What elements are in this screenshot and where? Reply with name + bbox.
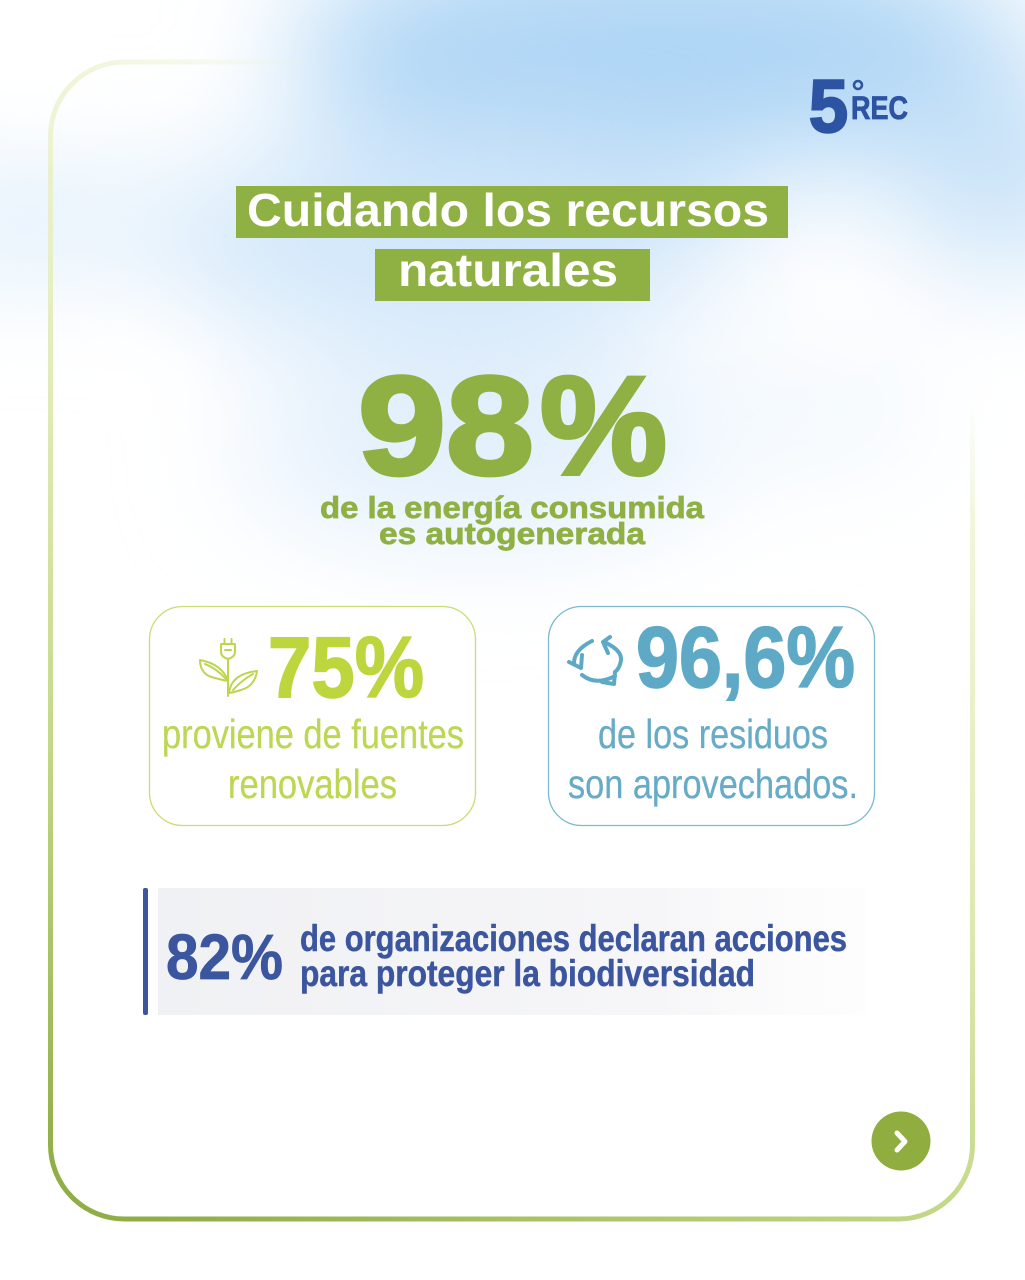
panel: renewable sources — [150, 606, 476, 826]
caption: waste reuse — [568, 711, 858, 807]
title line 1 highlight: Cuidando los recursos — [247, 184, 769, 236]
logo: 5° REC — [809, 65, 908, 148]
icon: recycle arrows — [569, 637, 621, 684]
title line 2 highlight — [375, 244, 650, 301]
next arrow button — [872, 1112, 930, 1170]
caption: renewable sources: renovables — [228, 761, 397, 807]
caption: biodiversity: para proteger la biodiversidad — [300, 953, 755, 994]
headline caption: es autogenerada — [379, 516, 646, 551]
stat: 82%: 82% — [166, 921, 283, 993]
panel: waste reuse — [548, 606, 874, 826]
icon: plug plant — [200, 639, 257, 696]
headline stat: 98% — [320, 347, 705, 551]
stat: 75%: 75% — [268, 620, 424, 716]
caption: renewable sources — [162, 711, 464, 807]
title line 2 highlight: naturales — [398, 244, 618, 296]
panel: biodiversity stat — [143, 888, 866, 1015]
caption: waste reuse: son aprovechados. — [568, 761, 858, 807]
caption: renewable sources: proviene de fuentes — [162, 711, 464, 757]
headline stat: 98%: % — [540, 347, 667, 504]
headline caption: de la energía consumida — [320, 490, 705, 525]
caption: waste reuse: de los residuos — [598, 711, 828, 757]
stat: 96,6%: 96,6% — [636, 610, 855, 706]
caption: biodiversity — [300, 918, 847, 994]
caption: biodiversity: de organizaciones declaran acciones — [300, 918, 847, 959]
headline caption — [320, 490, 705, 551]
title — [236, 184, 788, 301]
logo: 5° REC: 5 — [809, 65, 848, 148]
headline stat: 98%: 98 — [358, 347, 534, 504]
logo: 5° REC: REC — [851, 90, 908, 126]
